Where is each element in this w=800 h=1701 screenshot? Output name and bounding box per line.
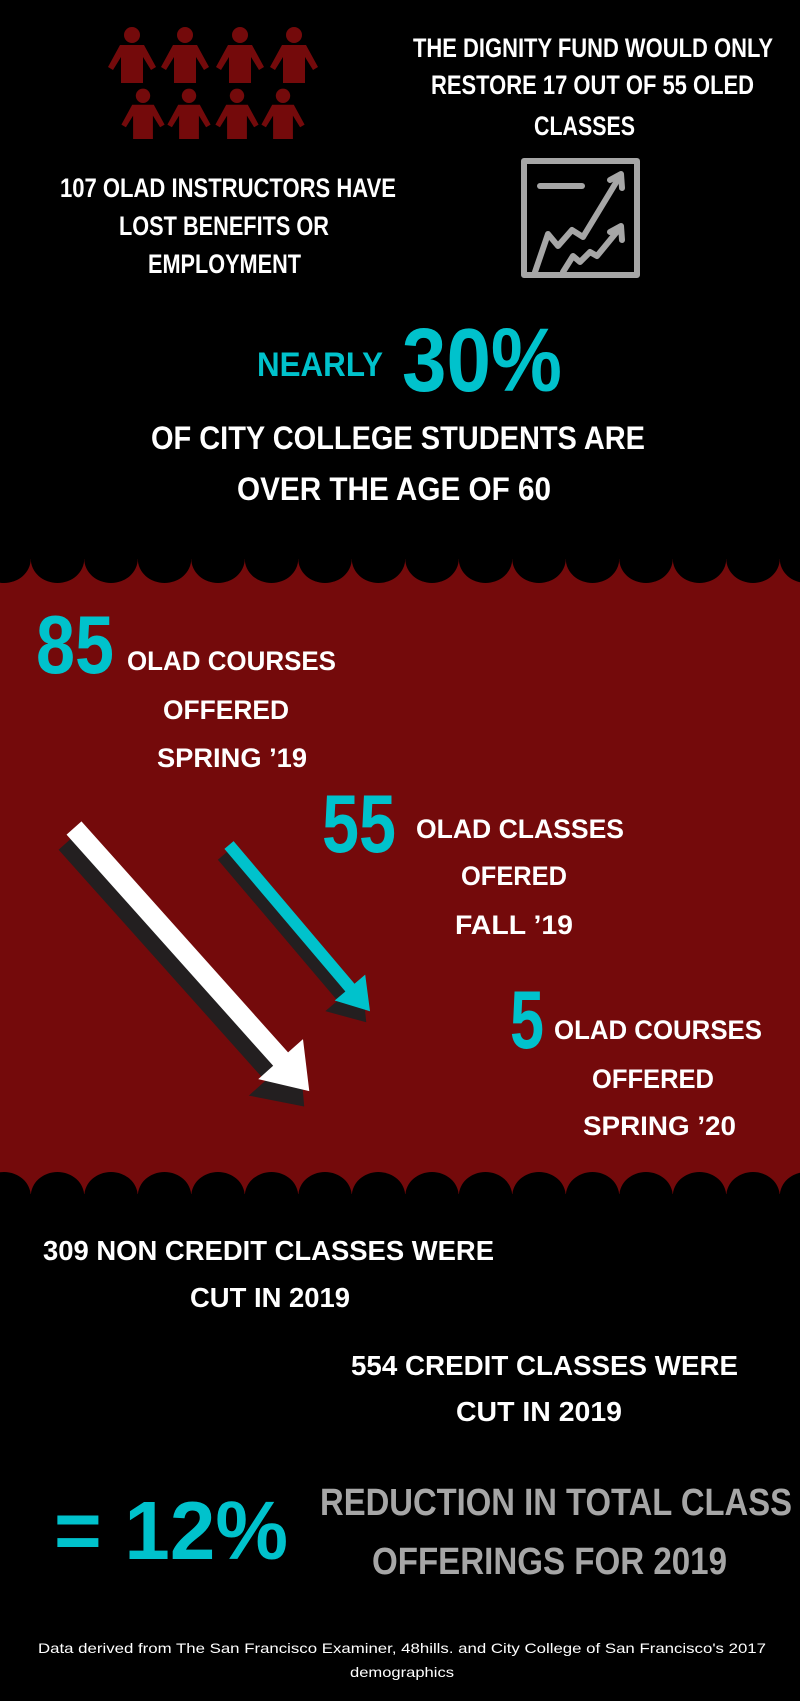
text: 309 non credit: 309 NON CREDIT CLASSES WERE <box>43 1235 494 1266</box>
stat: 5 spring 20: SPRING ’20 <box>583 1111 736 1141</box>
text: 554 credit <box>351 1350 738 1427</box>
text: 107 instructors: LOST BENEFITS OR <box>119 211 329 241</box>
footer: sources <box>38 1640 766 1680</box>
text: dignity fund: CLASSES <box>534 111 635 141</box>
stat: 85 spring 19: 85 <box>36 598 114 691</box>
footer: sources: Data derived from The San Francisco Examiner, 48hills. and City College of San Francisco's 2017 <box>38 1640 766 1656</box>
stat: 85 spring 19: OFFERED <box>163 695 289 725</box>
stat: 5 spring 20 <box>510 973 762 1141</box>
icon: chart <box>524 161 637 275</box>
text: 107 instructors: EMPLOYMENT <box>148 249 301 279</box>
arrow: white <box>38 808 337 1129</box>
text: 554 credit: 554 CREDIT CLASSES WERE <box>351 1350 738 1381</box>
text: city college students: OF CITY COLLEGE STUDENTS ARE <box>151 420 645 456</box>
stat: 12% reduction <box>54 1482 792 1583</box>
text: city college students <box>151 420 645 507</box>
text: 309 non credit: CUT IN 2019 <box>190 1282 350 1313</box>
stat: 55 fall 19: 55 <box>322 777 396 870</box>
stat: 5 spring 20: OFFERED <box>592 1064 714 1094</box>
stat: nearly 30%: NEARLY <box>257 346 383 384</box>
stat: 5 spring 20: 5 <box>510 973 544 1066</box>
red band <box>0 535 800 1220</box>
stat: 55 fall 19: FALL ’19 <box>455 910 573 940</box>
stat: 55 fall 19: OFERED <box>461 861 567 891</box>
icon: people <box>108 27 318 139</box>
stat: nearly 30%: 30% <box>402 311 562 411</box>
footer: sources: demographics <box>350 1664 454 1680</box>
stat: 85 spring 19: SPRING ’19 <box>157 743 307 773</box>
text: dignity fund <box>413 33 773 141</box>
text: 554 credit: CUT IN 2019 <box>456 1396 622 1427</box>
stat: 5 spring 20: OLAD COURSES <box>554 1015 762 1045</box>
stat: 12% reduction: = 12% <box>54 1484 288 1577</box>
stat: 55 fall 19: OLAD CLASSES <box>416 814 624 844</box>
stat: 55 fall 19 <box>322 777 624 940</box>
text: 107 instructors: 107 OLAD INSTRUCTORS HAVE <box>60 173 396 203</box>
stat: 85 spring 19 <box>36 598 336 773</box>
text: 107 instructors <box>60 173 396 279</box>
text: 309 non credit <box>43 1235 494 1313</box>
text: city college students: OVER THE AGE OF 60 <box>237 471 551 507</box>
stat: 12% reduction: OFFERINGS FOR 2019 <box>372 1541 727 1583</box>
stat: nearly 30% <box>257 311 562 411</box>
arrow: teal <box>203 832 389 1038</box>
stat: 85 spring 19: OLAD COURSES <box>127 646 336 676</box>
